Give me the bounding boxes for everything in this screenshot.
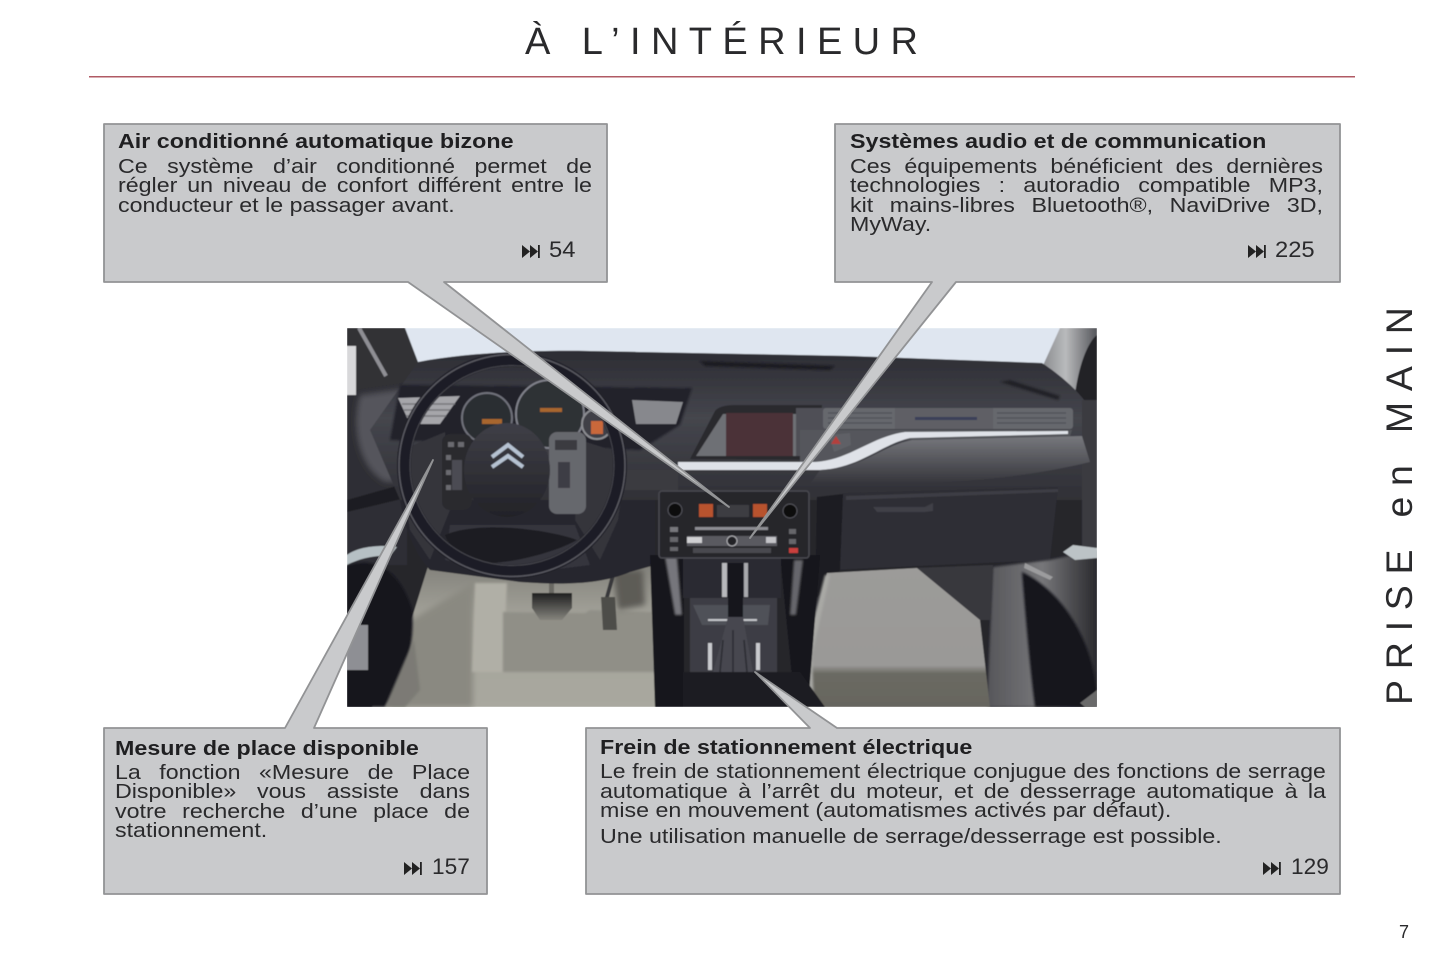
panel: air conditionné automatique bizone: [118, 130, 592, 262]
heading: Mesure de place disponible: [115, 737, 419, 760]
title: À L’INTÉRIEUR: [525, 20, 928, 63]
page reference 157: 157: [432, 854, 470, 879]
body text: Ce système d’air conditionné permet de: [118, 155, 592, 178]
page reference 129: 129: [1291, 854, 1329, 879]
panel: mesure de place disponible: [115, 737, 470, 879]
body text: [600, 760, 1326, 848]
body text: régler un niveau de confort différent entre le: [118, 174, 592, 197]
panel: frein de stationnement électrique: [600, 736, 1329, 879]
body text: kit mains-libres Bluetooth®, NaviDrive 3D,: [850, 194, 1323, 217]
body text: votre recherche d’une place de: [115, 800, 470, 823]
title rule: [89, 76, 1355, 78]
body text: [118, 155, 592, 217]
page reference 157: [404, 854, 470, 879]
body text: technologies : autoradio compatible MP3,: [850, 174, 1323, 197]
body text: [850, 155, 1323, 236]
body text: conducteur et le passager avant.: [118, 194, 455, 217]
page reference 225: [1248, 237, 1315, 262]
page number: 7: [1399, 922, 1409, 942]
side section title: PRISE en MAIN: [1378, 296, 1420, 705]
body text: [115, 761, 470, 842]
body text: La fonction «Mesure de Place: [115, 761, 470, 784]
page reference 129: [1263, 854, 1329, 879]
body text: Ces équipements bénéficient des dernières: [850, 155, 1323, 178]
callout shape: air conditionné: [104, 124, 729, 507]
body text: Disponible» vous assiste dans: [115, 780, 470, 803]
callout shape: systèmes audio: [750, 124, 1340, 538]
page reference 54: 54: [549, 237, 575, 262]
body text: MyWay.: [850, 213, 931, 236]
heading: Systèmes audio et de communication: [850, 130, 1266, 153]
callout shape: frein de stationnement: [586, 672, 1340, 894]
dashboard photo illustration: [347, 328, 1097, 707]
callout shape: mesure de place: [104, 460, 487, 894]
page reference 54: [522, 237, 575, 262]
body text: Une utilisation manuelle de serrage/desserrage est possible.: [600, 825, 1222, 848]
body text: mise en mouvement (automatismes activés par défaut).: [600, 799, 1171, 822]
heading: Frein de stationnement électrique: [600, 736, 972, 759]
page reference 225: 225: [1275, 237, 1315, 262]
panel: systèmes audio et de communication: [850, 130, 1323, 262]
body text: automatique à l’arrêt du moteur, et de desserrage automatique à la: [600, 780, 1326, 802]
body text: Le frein de stationnement électrique conjugue des fonctions de serrage: [600, 760, 1326, 783]
body text: stationnement.: [115, 819, 267, 842]
heading: Air conditionné automatique bizone: [118, 130, 514, 153]
